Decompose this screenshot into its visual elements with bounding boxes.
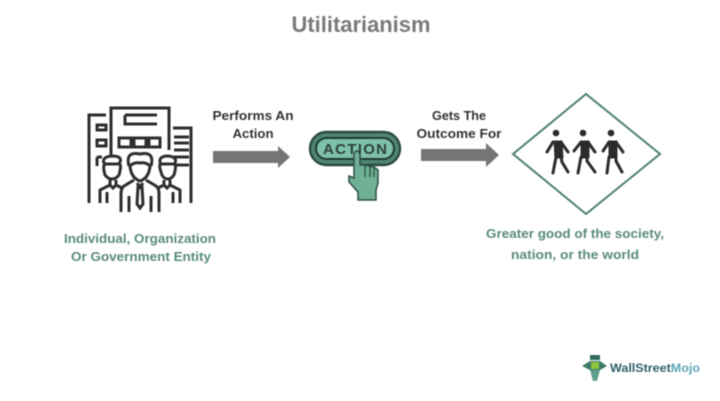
text: individual, organization label [64, 232, 216, 264]
logo wordmark: WallStreetMojo [610, 361, 700, 375]
title: Utilitarianism [292, 12, 430, 37]
walker 1 [547, 130, 568, 173]
logo mark [582, 355, 607, 381]
hand finger lines [365, 165, 374, 177]
text: gets the outcome for: Gets The [432, 108, 486, 123]
button outer [310, 132, 400, 165]
icon: right person [158, 156, 180, 203]
arrow: gets the outcome [421, 143, 499, 167]
text: individual, organization label: Or Government Entity [71, 250, 211, 264]
walker 2 [574, 130, 595, 173]
icon: right building [173, 128, 191, 203]
icon: left person [100, 156, 122, 203]
text: performs an action [212, 108, 294, 141]
text: performs an action: Performs An [212, 108, 294, 123]
text: greater good label [486, 227, 664, 262]
diamond [513, 94, 660, 214]
text: individual, organization label: Individual, Organization [64, 232, 216, 246]
logo: WallStreetMojo [582, 355, 700, 381]
text: performs an action: Action [232, 126, 274, 141]
text: gets the outcome for [416, 108, 502, 141]
hand [349, 151, 378, 200]
icon: organization building and people [89, 108, 191, 212]
icon: left building [89, 115, 106, 203]
icon: diamond with people walking [513, 94, 660, 214]
icon: centre person [121, 154, 159, 212]
button label: ACTION [323, 141, 387, 158]
text: greater good label: nation, or the world [511, 248, 639, 262]
icon: action button with hand [310, 132, 400, 200]
button inner [316, 138, 394, 159]
walker 3 [603, 130, 623, 173]
text: greater good label: Greater good of the society, [486, 227, 664, 241]
icon: centre building [111, 108, 169, 157]
text: gets the outcome for: Outcome For [416, 126, 502, 141]
arrow: performs an action [213, 146, 290, 168]
